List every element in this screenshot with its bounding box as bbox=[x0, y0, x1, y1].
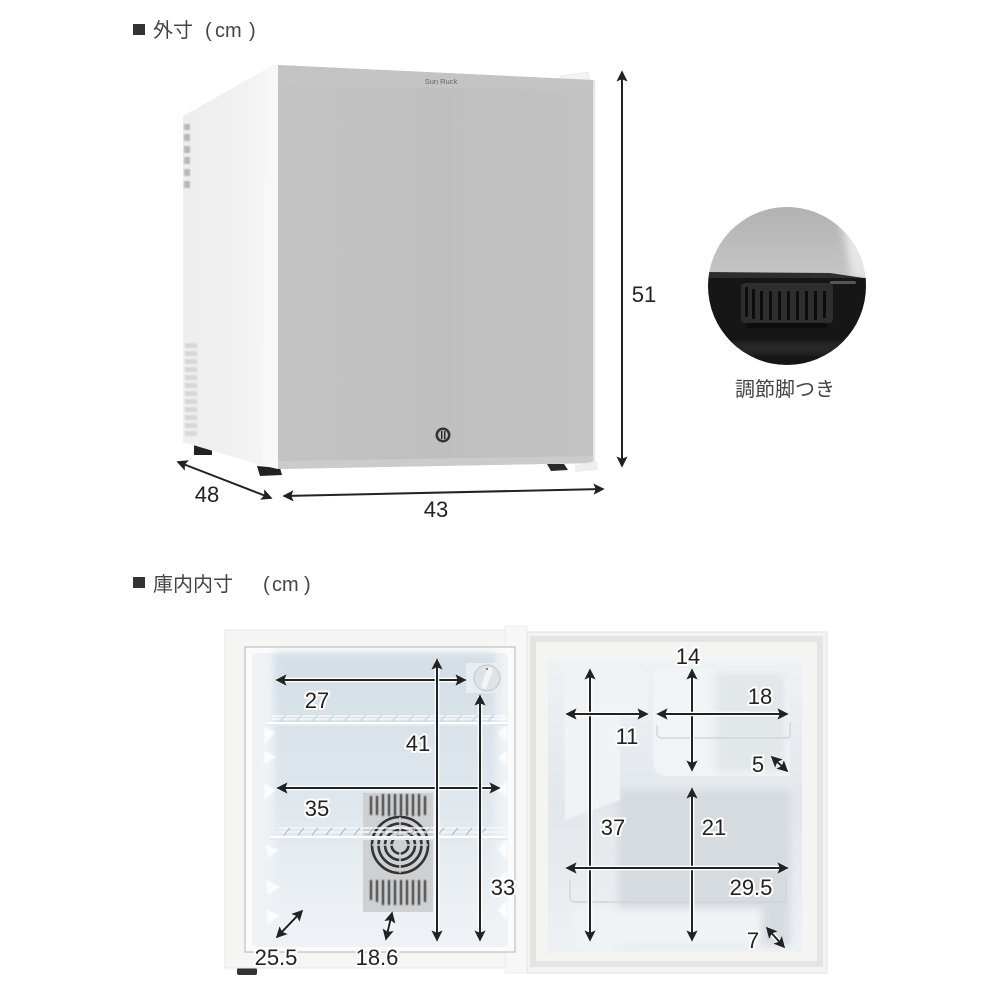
arrow: width 43 bbox=[284, 489, 603, 496]
lock bbox=[436, 428, 450, 442]
arrow: 14 bbox=[690, 670, 694, 770]
upper shelf lip bbox=[657, 722, 790, 738]
heading: interior dimensions: cm bbox=[272, 574, 299, 596]
hinge strip bbox=[505, 626, 527, 973]
heading: interior dimensions bbox=[133, 573, 311, 596]
door bottom band bbox=[278, 456, 595, 469]
heading: interior dimensions: 庫内内寸 bbox=[153, 574, 233, 596]
label: 18.6: 18.6 bbox=[356, 945, 398, 970]
heading: exterior dimensions: cm bbox=[215, 20, 242, 42]
label: 43: 43 bbox=[424, 497, 448, 522]
label: 51: 51 bbox=[632, 282, 656, 307]
callout: adjustable foot photo bbox=[708, 207, 866, 365]
label: 7: 7 bbox=[747, 928, 759, 953]
heading: exterior dimensions: ( bbox=[205, 20, 212, 42]
arrow: 7 bbox=[767, 928, 784, 947]
arrow: 33 bbox=[478, 696, 482, 940]
arrow: height 51 bbox=[621, 72, 623, 466]
arrow: depth 48 bbox=[178, 462, 271, 498]
arrow: 37 bbox=[588, 670, 592, 940]
heading: interior dimensions: ) bbox=[304, 574, 311, 596]
door liner bbox=[548, 660, 802, 953]
L-shaped recess bbox=[618, 700, 790, 945]
arrow: 29.5 bbox=[567, 866, 787, 870]
door outer bbox=[527, 632, 827, 973]
fan bbox=[372, 817, 428, 873]
upper right pocket bbox=[653, 668, 790, 776]
arrow: 21 bbox=[690, 789, 694, 940]
lower shelf lip bbox=[570, 878, 786, 902]
side vents bottom bbox=[185, 343, 197, 436]
arrow: 11 bbox=[567, 712, 647, 716]
arrow: 27 bbox=[277, 678, 465, 682]
label: 25.5: 25.5 bbox=[255, 945, 297, 970]
lower shelf bbox=[270, 828, 507, 840]
heading: exterior dimensions bbox=[133, 19, 256, 42]
label: 35: 35 bbox=[305, 796, 329, 821]
highlight bbox=[838, 227, 866, 278]
door right edge bbox=[593, 80, 595, 463]
arrow: 35 bbox=[278, 786, 499, 790]
caption: adjustable foot: 調節脚つき bbox=[735, 378, 835, 401]
bottom pocket bbox=[572, 908, 762, 948]
back foot bbox=[194, 445, 212, 455]
heading: exterior dimensions: 外寸 bbox=[153, 20, 193, 42]
heading: interior dimensions: ( bbox=[263, 574, 270, 596]
foot bbox=[237, 968, 257, 975]
hinge top right bbox=[560, 72, 590, 82]
label: 33: 33 bbox=[491, 875, 515, 900]
label: 5: 5 bbox=[752, 752, 764, 777]
upper left pocket bbox=[564, 668, 648, 820]
door top band bbox=[278, 65, 593, 90]
arrow: 25.5 bbox=[277, 911, 302, 937]
label: 29.5: 29.5 bbox=[730, 875, 772, 900]
heading: exterior dimensions: ) bbox=[249, 20, 256, 42]
label: 37: 37 bbox=[601, 815, 625, 840]
label: 48: 48 bbox=[195, 482, 219, 507]
arrow: 41 bbox=[435, 660, 439, 940]
outer frame bbox=[225, 630, 515, 968]
label: 11: 11 bbox=[616, 724, 638, 749]
arrow: 18.6 bbox=[386, 913, 392, 939]
fridge interior photo: cabinet bbox=[225, 626, 527, 975]
door front bbox=[278, 65, 595, 469]
fan panel bbox=[363, 793, 433, 912]
door edge bbox=[263, 65, 278, 469]
arrow: 5 bbox=[772, 757, 787, 771]
logo: Sun Ruck bbox=[425, 77, 458, 86]
cavity bbox=[252, 653, 508, 947]
arrow: 18 bbox=[658, 712, 787, 716]
side vents top bbox=[184, 124, 190, 188]
label: 14: 14 bbox=[676, 644, 700, 669]
label: 27: 27 bbox=[305, 688, 329, 713]
inner frame bbox=[245, 647, 515, 952]
fridge exterior photo bbox=[183, 65, 598, 476]
side panel bbox=[183, 65, 278, 469]
adjuster knob bbox=[741, 283, 833, 328]
left and right shelf supports bbox=[264, 725, 507, 925]
label: 18: 18 bbox=[748, 684, 772, 709]
front left foot bbox=[257, 466, 282, 476]
fridge interior photo: door inside bbox=[527, 632, 827, 973]
gasket bbox=[533, 639, 820, 964]
back wall bbox=[274, 653, 496, 938]
upper shelf bbox=[267, 715, 507, 726]
hinge bottom right bbox=[575, 461, 598, 472]
label: 21: 21 bbox=[702, 815, 726, 840]
thermostat dial bbox=[466, 663, 502, 693]
label: 41: 41 bbox=[406, 731, 430, 756]
front right foot bbox=[547, 464, 568, 471]
